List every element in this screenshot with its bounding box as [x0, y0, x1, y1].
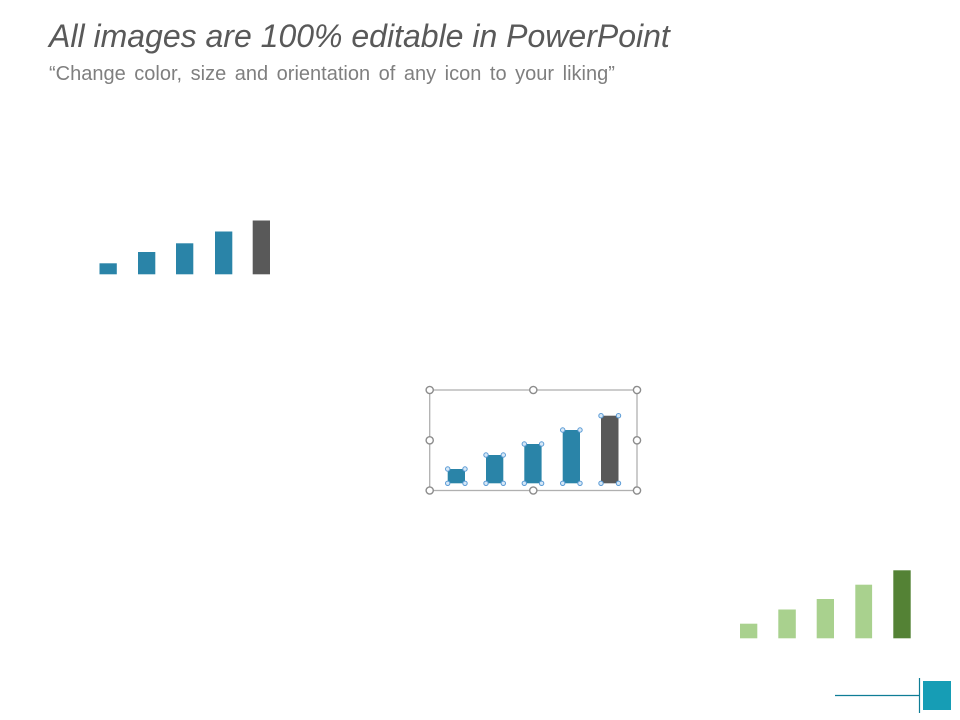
icon: green bar chart, bottom right: [740, 570, 911, 638]
subtitle: “Change color, size and orientation of any icon to your liking”: [49, 63, 615, 85]
title: All images are 100% editable in PowerPoint: [49, 18, 670, 54]
footer accent: line and teal square: [835, 678, 951, 713]
icon: selected bar chart with edit handles, centre: [426, 386, 641, 494]
icon: blue bar chart, top left: [100, 220, 270, 274]
